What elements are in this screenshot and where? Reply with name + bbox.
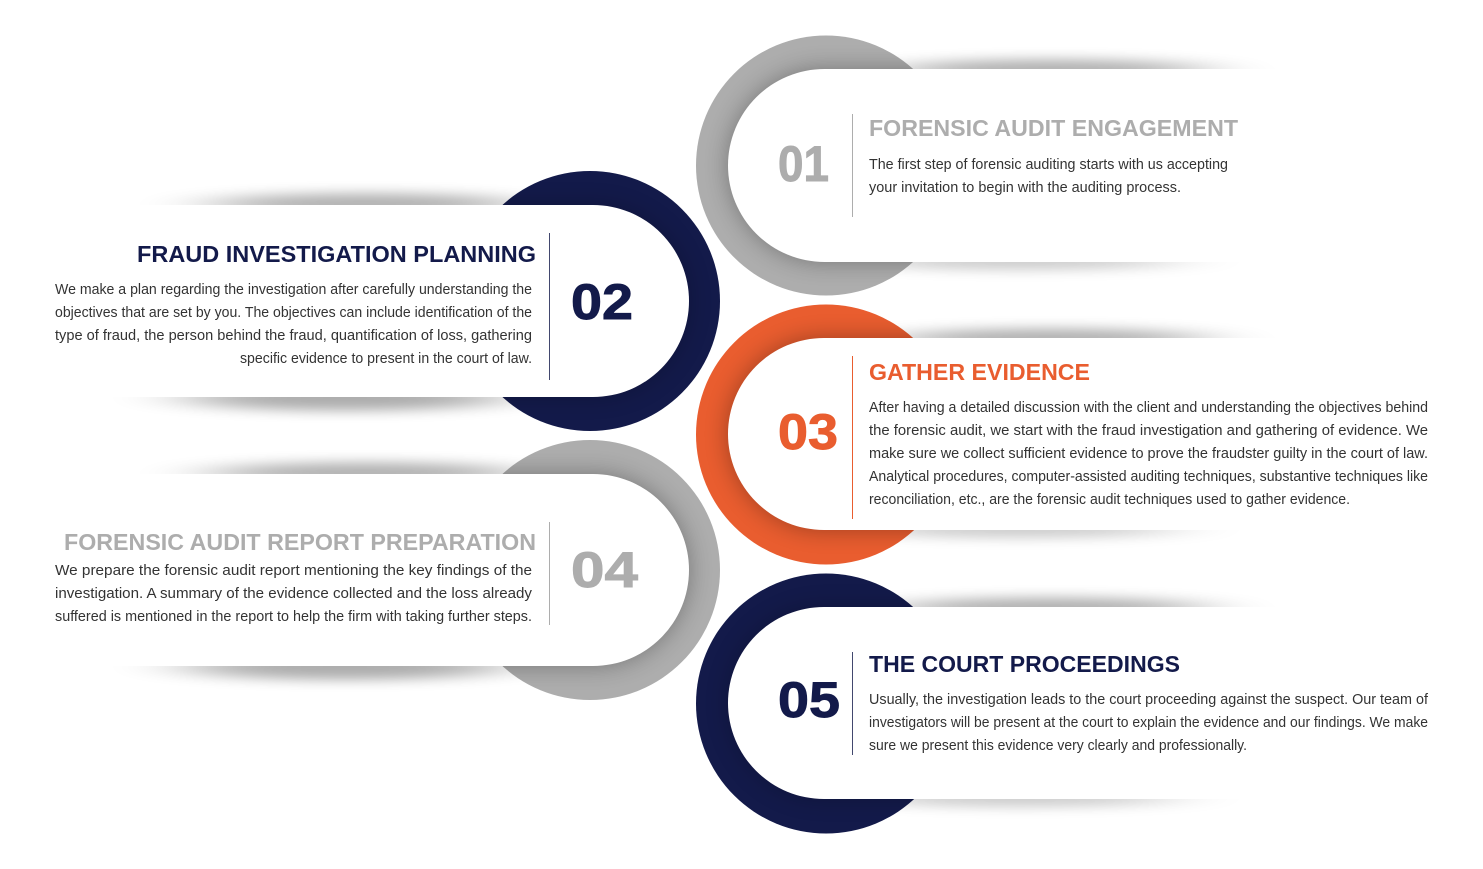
text: step 05 description bbox=[869, 692, 1429, 754]
text: step 03 description: reconciliation, etc., are the forensic audit techniques used to gather evidence. bbox=[869, 492, 1350, 508]
ring: step 05 bbox=[696, 574, 956, 834]
text: step 03 description bbox=[869, 400, 1428, 508]
heading: step 02: FRAUD INVESTIGATION PLANNING bbox=[137, 241, 536, 267]
text: step 04 description bbox=[55, 563, 533, 625]
panel: step 01 forensic audit engagement bbox=[696, 36, 1483, 296]
text: step 01 description bbox=[869, 157, 1228, 196]
heading: step 03: GATHER EVIDENCE bbox=[869, 359, 1090, 385]
text: step 05 description: sure we present this evidence very clearly and professionally. bbox=[869, 738, 1247, 754]
text: step 01 description: The first step of forensic auditing starts with us accepting bbox=[869, 157, 1228, 173]
text: step 02 description bbox=[55, 282, 532, 367]
text: step 05 description: investigators will be present at the court to explain the evidence and our findings. We make bbox=[869, 715, 1428, 731]
ring: step 01 bbox=[696, 36, 956, 296]
text: step 04 description: investigation. A summary of the evidence collected and the loss already bbox=[55, 586, 533, 602]
heading: step 04: FORENSIC AUDIT REPORT PREPARATION bbox=[64, 529, 536, 555]
text: step 05 description: Usually, the investigation leads to the court proceeding against the suspect. Our team of bbox=[869, 692, 1429, 708]
ring: step 02 bbox=[460, 171, 720, 431]
number: 01: 01 bbox=[778, 136, 829, 192]
number: 03: 03 bbox=[778, 404, 838, 460]
panel: step 04 forensic audit report preparation bbox=[0, 440, 720, 700]
ring: step 03 bbox=[696, 304, 956, 564]
text: step 02 description: specific evidence to present in the court of law. bbox=[240, 351, 532, 367]
text: step 04 description: suffered is mentioned in the report to help the firm with taking further steps. bbox=[55, 609, 532, 625]
text: step 02 description: We make a plan regarding the investigation after carefully understanding the bbox=[55, 282, 532, 298]
number: 04: 04 bbox=[571, 542, 638, 598]
text: step 02 description: type of fraud, the person behind the fraud, quantification of loss, gathering bbox=[55, 328, 532, 344]
ring: step 04 bbox=[460, 440, 720, 700]
text: step 03 description: the forensic audit, we start with the fraud investigation and gathering of evidence. We bbox=[869, 423, 1428, 439]
panel: step 03 gather evidence bbox=[696, 304, 1483, 564]
panel: step 05 the court proceedings bbox=[696, 574, 1483, 834]
heading: step 05: THE COURT PROCEEDINGS bbox=[869, 651, 1180, 677]
text: step 03 description: Analytical procedures, computer-assisted auditing techniques, substantive techniques like bbox=[869, 469, 1428, 485]
text: step 02 description: objectives that are set by you. The objectives can include identification of the bbox=[55, 305, 532, 321]
number: 02: 02 bbox=[571, 274, 633, 330]
number: 05: 05 bbox=[778, 672, 840, 728]
heading: step 01: FORENSIC AUDIT ENGAGEMENT bbox=[869, 115, 1238, 141]
text: step 01 description: your invitation to begin with the auditing process. bbox=[869, 180, 1181, 196]
text: step 03 description: After having a detailed discussion with the client and understanding the objectives behind bbox=[869, 400, 1428, 416]
text: step 03 description: make sure we collect sufficient evidence to prove the fraudster guilty in the court of law. bbox=[869, 446, 1428, 462]
panel: step 02 fraud investigation planning bbox=[0, 171, 720, 431]
text: step 04 description: We prepare the forensic audit report mentioning the key findings of the bbox=[55, 563, 532, 579]
